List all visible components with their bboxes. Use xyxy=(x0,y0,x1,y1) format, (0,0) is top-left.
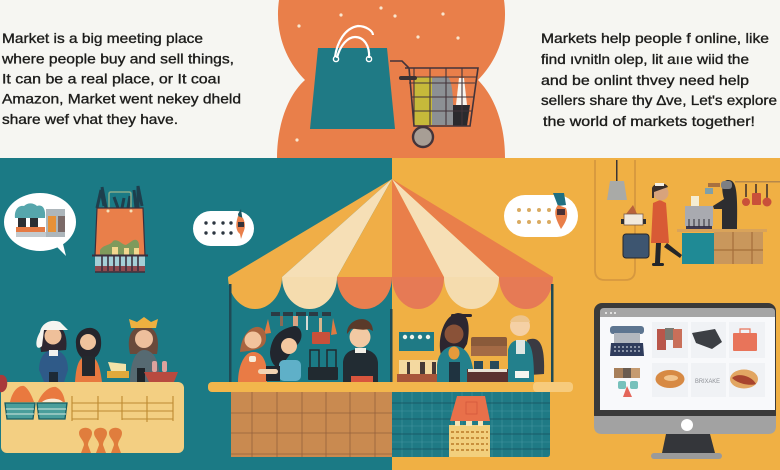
computer monitor with online shop xyxy=(594,303,776,459)
counter top xyxy=(208,382,573,392)
wooden fence xyxy=(72,396,173,422)
three orange produce pieces xyxy=(79,428,122,453)
wall pipe xyxy=(595,160,635,280)
product: printer xyxy=(610,326,644,356)
kitchen counter with stockpot xyxy=(677,196,767,264)
text block: right intro: sellers share thy ∆ve, Let's explore xyxy=(541,92,777,108)
text block: right intro: the world of markets together! xyxy=(543,113,755,129)
stand and base xyxy=(651,434,722,459)
counter panel: plaid xyxy=(392,392,550,457)
monitor body xyxy=(594,303,776,434)
bubble: dots with figure, yellow side xyxy=(504,193,578,237)
product: bread ring xyxy=(656,370,684,388)
product: sandwich xyxy=(730,370,758,388)
person: woman in orange with black apron xyxy=(75,328,102,382)
product: dark packets xyxy=(692,329,722,349)
table: left market stall xyxy=(1,382,184,453)
person: woman in teal holding a cup xyxy=(437,313,474,382)
text block: left intro: Amazon, Market went nekey dheld xyxy=(2,90,241,106)
counter panel: brick xyxy=(231,392,392,457)
stall left: hanging goods xyxy=(264,312,338,380)
person: woman in orange xyxy=(238,327,267,382)
icon: shopping cart xyxy=(390,61,478,147)
icon: oven xyxy=(623,234,649,258)
baskets of produce xyxy=(5,386,67,419)
icon: cooking pot xyxy=(621,205,646,225)
orange blob xyxy=(277,0,505,158)
person: dark-robed cook xyxy=(705,180,737,229)
product: orange bag xyxy=(733,329,757,351)
icon: wicker basket with orange lid xyxy=(449,396,490,457)
person: woman with white headscarf xyxy=(36,321,68,382)
product: assorted goods xyxy=(614,368,640,397)
panel: yellow lower-right background xyxy=(392,158,780,470)
panel: teal lower-left background xyxy=(0,158,392,470)
browser window xyxy=(600,308,775,410)
text block: left intro: share wef vhat they have. xyxy=(2,111,178,127)
text block: left intro: Market is a big meeting place xyxy=(2,30,203,46)
text block: right intro: and be onlint thvey need help xyxy=(541,72,749,88)
red crate at left edge xyxy=(0,375,7,392)
text block: right intro xyxy=(541,30,777,129)
icon: teal shopping bag xyxy=(310,26,395,129)
briefcase and table goods xyxy=(467,337,508,382)
person: man in black xyxy=(343,319,378,382)
sparkles xyxy=(295,6,460,142)
text block: left intro xyxy=(1,30,241,127)
person: walking cook in red xyxy=(651,183,682,266)
icon: grocery bag with vegetables xyxy=(92,186,148,272)
person: man in teal apron xyxy=(508,315,544,382)
stall poles xyxy=(229,284,554,382)
text block: right intro: Markets help people f online, like xyxy=(541,30,769,46)
hanging utensils on rail xyxy=(735,181,780,206)
red basket with bottles xyxy=(144,361,178,382)
bubble: shop building xyxy=(4,193,76,256)
person: woman with crown in grey xyxy=(129,317,160,382)
text block: right intro: find ıvnitln olep, lit aııe wiid the xyxy=(541,51,749,67)
product: red packets xyxy=(657,328,682,350)
awning: striped market canopy xyxy=(228,179,553,309)
text block: left intro: where people buy and sell things, xyxy=(1,50,234,66)
hero: orange blob with shopping bag and cart xyxy=(277,0,505,158)
text block: left intro: It can be a real place, or It coaı xyxy=(2,70,221,86)
person: woman with black hair in blue xyxy=(258,326,302,381)
cheese board xyxy=(107,362,129,378)
product label: BRIXAKE xyxy=(695,379,720,385)
bubble: dots with figure, teal side xyxy=(193,209,254,246)
icon: pendant lamp xyxy=(607,160,627,200)
stall right: shelf and sign xyxy=(397,332,441,382)
